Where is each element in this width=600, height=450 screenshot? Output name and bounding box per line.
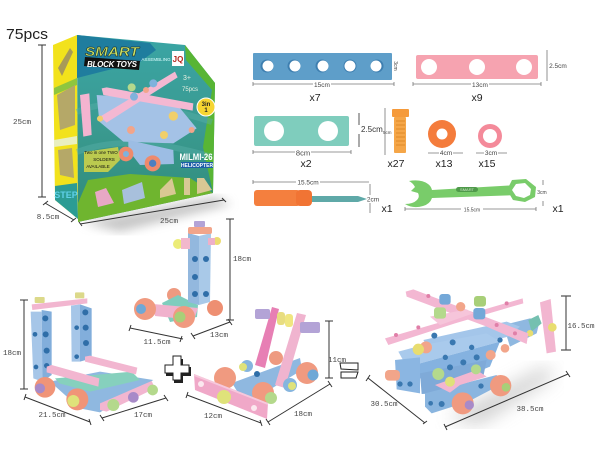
helicopter body [385, 322, 520, 394]
dimensions: cart model: 18cm [294, 411, 312, 419]
box callout: yellow splash: Two in one TWO [84, 150, 118, 155]
box model name [180, 152, 213, 169]
part: screwdriver x1: 15.5cm [297, 180, 319, 186]
part: orange washer x13: 4cm [440, 150, 452, 157]
part: blue bar x7: 3cm [392, 61, 398, 71]
box badge: 3 in 1 [197, 98, 215, 116]
part: green wrench x1: 15.5cm [464, 208, 480, 214]
product box [53, 35, 232, 232]
toy: helicopter model, bottom right [385, 289, 557, 423]
dimensions: cart model: 12cm [204, 413, 222, 421]
dimensions: cart model [186, 321, 346, 426]
part: green wrench x1: 3cm [537, 190, 547, 196]
title: piece count: 75pcs [6, 26, 48, 43]
equals symbol [340, 363, 358, 378]
part: orange washer x13 [428, 120, 463, 170]
part: pink ring x15: 3cm [485, 150, 497, 157]
box dimensions: 8.5cm [37, 214, 60, 222]
part: teal bar x2: x2 [300, 158, 312, 170]
part: screwdriver x1: x1 [381, 203, 393, 215]
box logo: 75pcs [182, 87, 198, 93]
part: screwdriver x1: 2cm [367, 196, 379, 204]
helicopter rotor [385, 289, 528, 345]
box logo: SMART [85, 44, 140, 59]
part: teal bar x2: 2.5cm [361, 125, 383, 134]
box front panel [77, 35, 215, 222]
part: screwdriver x1 [253, 178, 393, 215]
part: blue bar x7: x7 [309, 92, 321, 104]
toy: chair model, bottom left [31, 292, 158, 412]
box logo: ASSEMBLING [141, 57, 171, 62]
part: pink bar x9: x9 [471, 92, 483, 104]
part: pink bar x9 [413, 50, 567, 104]
box callout: yellow splash: AVAILABLE [86, 164, 110, 169]
dimensions: chair model: 21.5cm [38, 412, 66, 420]
box model name: HELICOPTER [181, 163, 213, 169]
helicopter skid and wheels [425, 364, 511, 414]
box callout: yellow splash [84, 147, 120, 172]
part: orange bolt x27: x27 [388, 158, 405, 170]
part: green wrench x1 [405, 179, 564, 215]
box side panel [53, 35, 78, 219]
dimensions: cart model: 11cm [328, 357, 346, 365]
box logo: 3+ [183, 75, 191, 82]
helicopter tail [503, 299, 557, 353]
part: orange bolt x27 [383, 108, 409, 170]
part: pink ring x15: x15 [479, 158, 496, 170]
dimensions: tall model [129, 219, 251, 347]
toy: cart model, bottom centre right [194, 307, 320, 419]
box model name: MILMI-26 [180, 152, 212, 162]
part: blue bar x7 [253, 53, 398, 104]
box step thumbnails [95, 178, 212, 207]
plus symbol [165, 356, 191, 383]
dimensions: chair model: 18cm [3, 350, 21, 358]
box badge: 3 in 1: 3in [202, 102, 211, 108]
box helicopter illustration [80, 72, 197, 171]
box dimensions: 25cm [160, 218, 178, 226]
dimensions: helicopter: 30.5cm [370, 401, 398, 409]
dimensions: tall model: 13cm [210, 332, 228, 340]
part: orange bolt x27: 5cm [383, 130, 392, 135]
part: orange washer x13: x13 [436, 158, 453, 170]
part: blue bar x7: 15cm [314, 82, 330, 89]
box side panel: STEP [54, 190, 78, 200]
box dimensions: 25cm [13, 119, 31, 127]
box dimensions [13, 45, 226, 226]
part: teal bar x2: 8cm [296, 148, 310, 158]
dimensions: chair model: 17cm [134, 412, 152, 420]
part: green wrench x1: SMART [460, 187, 475, 192]
part: pink bar x9: 2.5cm [549, 63, 567, 70]
part: pink bar x9: 13cm [472, 82, 488, 89]
dimensions: tall model: 11.5cm [143, 339, 171, 347]
dimensions: helicopter [366, 296, 595, 430]
dimensions: chair model [3, 300, 168, 425]
dimensions: helicopter: 16.5cm [567, 323, 595, 331]
box badge: 3 in 1: 1 [204, 108, 208, 114]
part: green wrench x1: x1 [552, 203, 564, 215]
dimensions: helicopter: 38.5cm [516, 406, 544, 414]
part: pink ring x15 [476, 124, 507, 170]
box logo [84, 44, 198, 93]
dimensions: tall model: 18cm [233, 256, 251, 264]
box callout: yellow splash: SOLDERS [93, 157, 115, 162]
toy: tall model, top centre [134, 221, 223, 328]
part: teal bar x2 [253, 113, 383, 170]
box logo: BLOCK TOYS [87, 60, 138, 69]
box logo: JQ [173, 55, 183, 64]
